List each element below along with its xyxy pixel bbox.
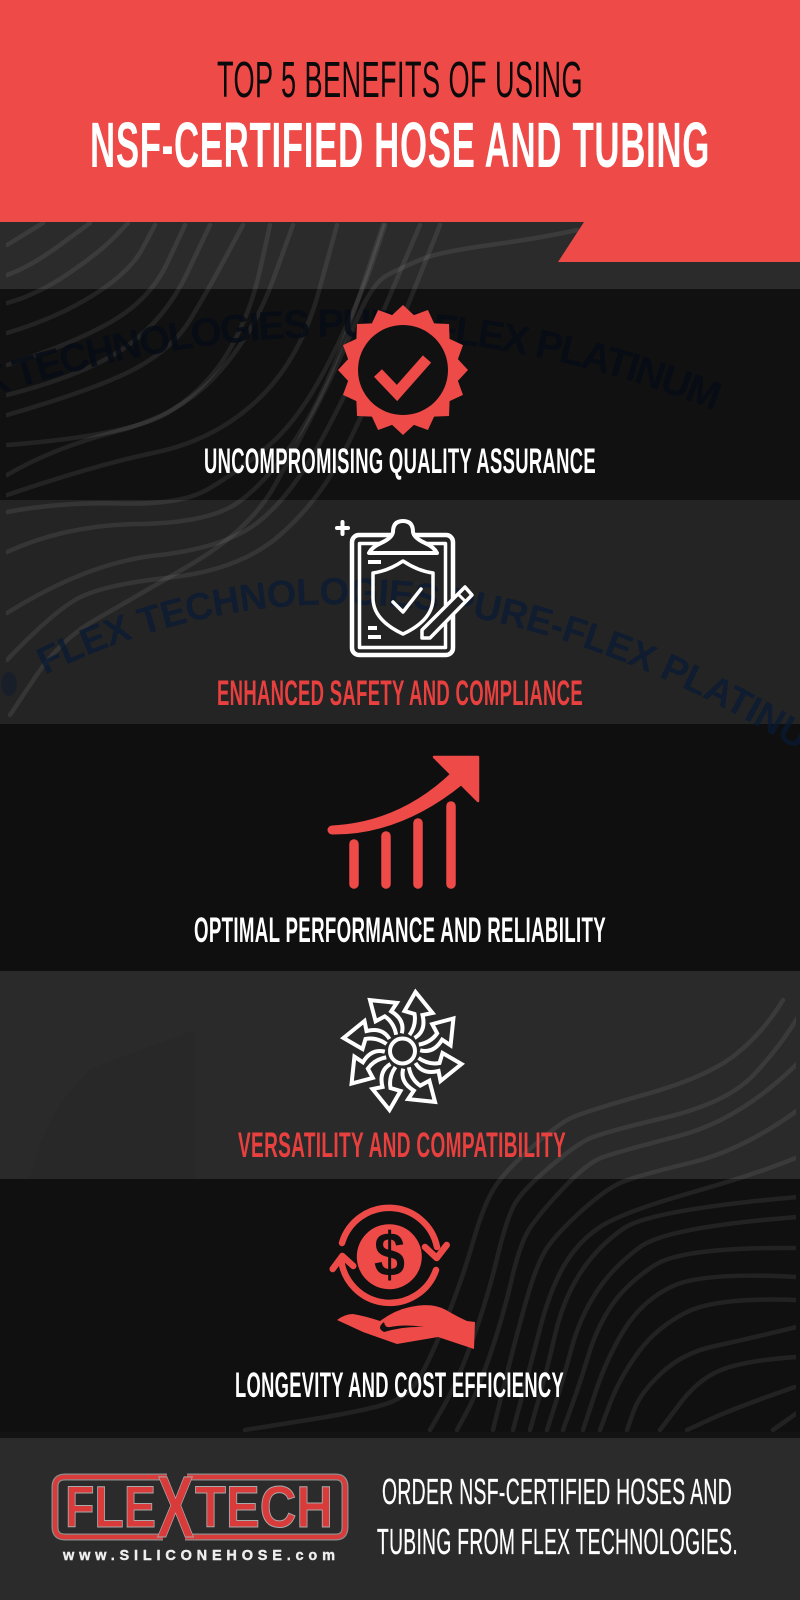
logo: FlexTech: TECH xyxy=(195,1475,333,1540)
band 2 background xyxy=(0,500,800,724)
logo: FlexTech: FLE xyxy=(65,1475,156,1540)
logo: FlexTech: www.SILICONEHOSE.com xyxy=(62,1548,335,1564)
watermark: small hose logo xyxy=(1,672,17,696)
logo: FlexTech xyxy=(55,1459,345,1564)
icon: quality badge with check xyxy=(338,305,468,435)
footer call to action xyxy=(377,1471,738,1562)
icon: dollar coin over hand xyxy=(333,1208,475,1349)
footer strip xyxy=(0,1432,800,1438)
band 4 faint hose photo shape xyxy=(30,1030,195,1179)
header banner xyxy=(0,0,800,262)
band 4 background xyxy=(0,971,800,1179)
logo: FlexTech: X xyxy=(157,1459,194,1556)
icon: rising bar chart with arrow xyxy=(328,757,478,884)
footer panel xyxy=(0,1438,800,1600)
band 1 background xyxy=(0,289,800,500)
icon: swirl of arrows xyxy=(340,988,465,1114)
band 3 background xyxy=(0,724,800,971)
band 5 background xyxy=(0,1179,800,1432)
icon: clipboard with shield xyxy=(337,521,472,655)
icon: dollar coin over hand: $ xyxy=(374,1221,405,1290)
background contour lines xyxy=(7,223,798,1430)
